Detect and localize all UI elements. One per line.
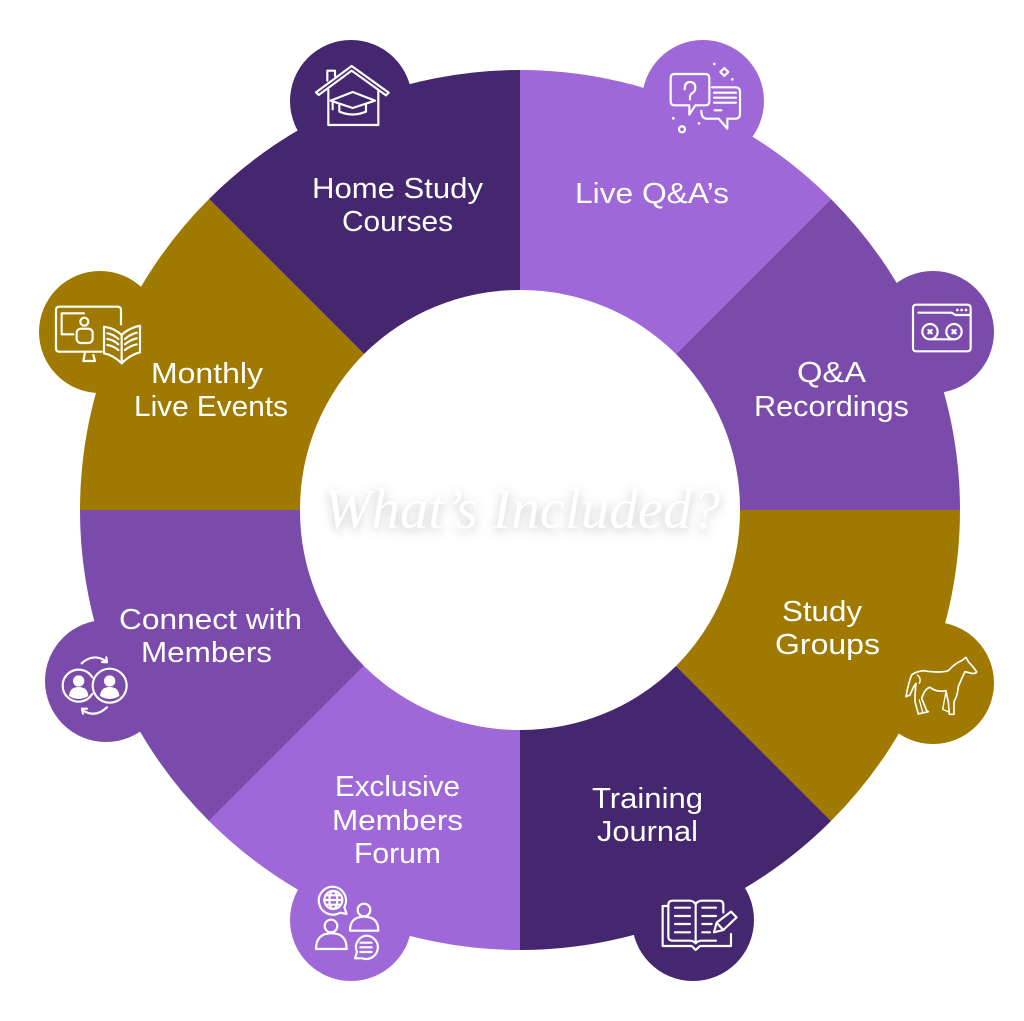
label: Q&A Recordings: Recordings bbox=[754, 391, 909, 423]
label: Q&A Recordings: Q&A bbox=[797, 357, 867, 389]
label: Training Journal: Training bbox=[592, 783, 703, 815]
label: Live Q&A's: Live Q&A’s bbox=[575, 178, 729, 210]
label: Home Study Courses: Courses bbox=[342, 206, 453, 238]
icon: horse bbox=[906, 657, 977, 714]
icon: video window with tape reels bbox=[913, 305, 971, 351]
icon: open book with pencil bbox=[663, 901, 737, 950]
segment: Live Q&A's bbox=[520, 40, 831, 354]
icon: house with graduation cap bbox=[316, 66, 389, 125]
segment: Study Groups bbox=[676, 510, 994, 821]
label: Exclusive Members Forum: Members bbox=[332, 805, 463, 837]
segment: Training Journal bbox=[520, 666, 831, 981]
segment: Monthly Live Events bbox=[39, 199, 364, 510]
segment: Q&A Recordings bbox=[676, 199, 994, 510]
label: Exclusive Members Forum: Exclusive bbox=[335, 771, 460, 803]
label: Connect with Members bbox=[119, 604, 302, 669]
label: Training Journal: Journal bbox=[597, 816, 698, 848]
segment: Connect with Members bbox=[45, 510, 364, 821]
label: Connect with Members: Connect with bbox=[119, 604, 302, 636]
label: Study Groups: Groups bbox=[775, 629, 880, 661]
label: Monthly Live Events: Monthly bbox=[151, 358, 264, 390]
label: Monthly Live Events bbox=[134, 358, 288, 423]
label: Monthly Live Events: Live Events bbox=[134, 391, 288, 423]
label: Home Study Courses bbox=[312, 173, 484, 238]
icon: two people connected bbox=[63, 657, 127, 714]
title: What's Included?: What’s Included? bbox=[324, 478, 720, 541]
icon: monitor with presenter and book bbox=[56, 307, 140, 363]
label: Exclusive Members Forum: Forum bbox=[354, 838, 441, 870]
label: Q&A Recordings bbox=[754, 357, 909, 423]
label: Training Journal bbox=[592, 783, 703, 848]
segment: Home Study Courses bbox=[209, 40, 520, 354]
segment: Exclusive Members Forum bbox=[209, 666, 520, 981]
label: Study Groups: Study bbox=[782, 596, 863, 628]
icon: question and answer bubbles bbox=[671, 63, 740, 132]
label: Home Study Courses: Home Study bbox=[312, 173, 484, 205]
label: Exclusive Members Forum bbox=[332, 771, 463, 870]
icon: community forum bbox=[316, 887, 378, 959]
label: Study Groups bbox=[775, 596, 880, 661]
label: Connect with Members: Members bbox=[141, 637, 272, 669]
